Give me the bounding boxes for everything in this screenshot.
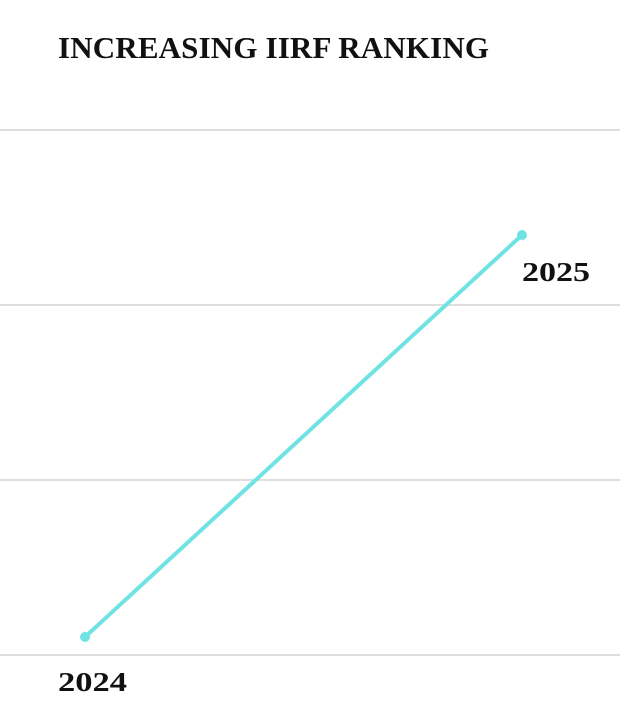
label: 2025: 2025 [522, 257, 590, 287]
title: INCREASING IIRF RANKING [58, 30, 489, 65]
label: 2024: 2024 [58, 667, 127, 697]
data line [80, 230, 527, 642]
